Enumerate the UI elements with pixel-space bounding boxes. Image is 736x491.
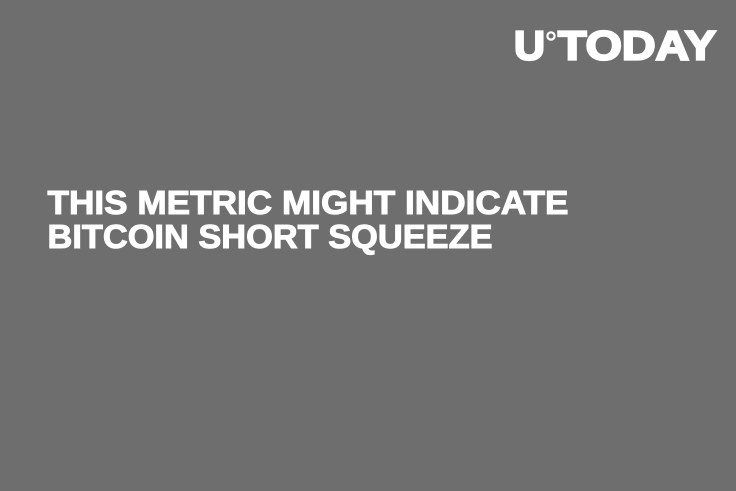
title: THIS METRIC MIGHT INDICATE — [48, 184, 568, 221]
logo: U.Today: U — [514, 22, 545, 68]
logo: U.Today — [514, 22, 716, 68]
title — [48, 184, 568, 255]
logo: U.Today: TODAY — [558, 22, 716, 68]
title: BITCOIN SHORT SQUEEZE — [48, 218, 492, 255]
